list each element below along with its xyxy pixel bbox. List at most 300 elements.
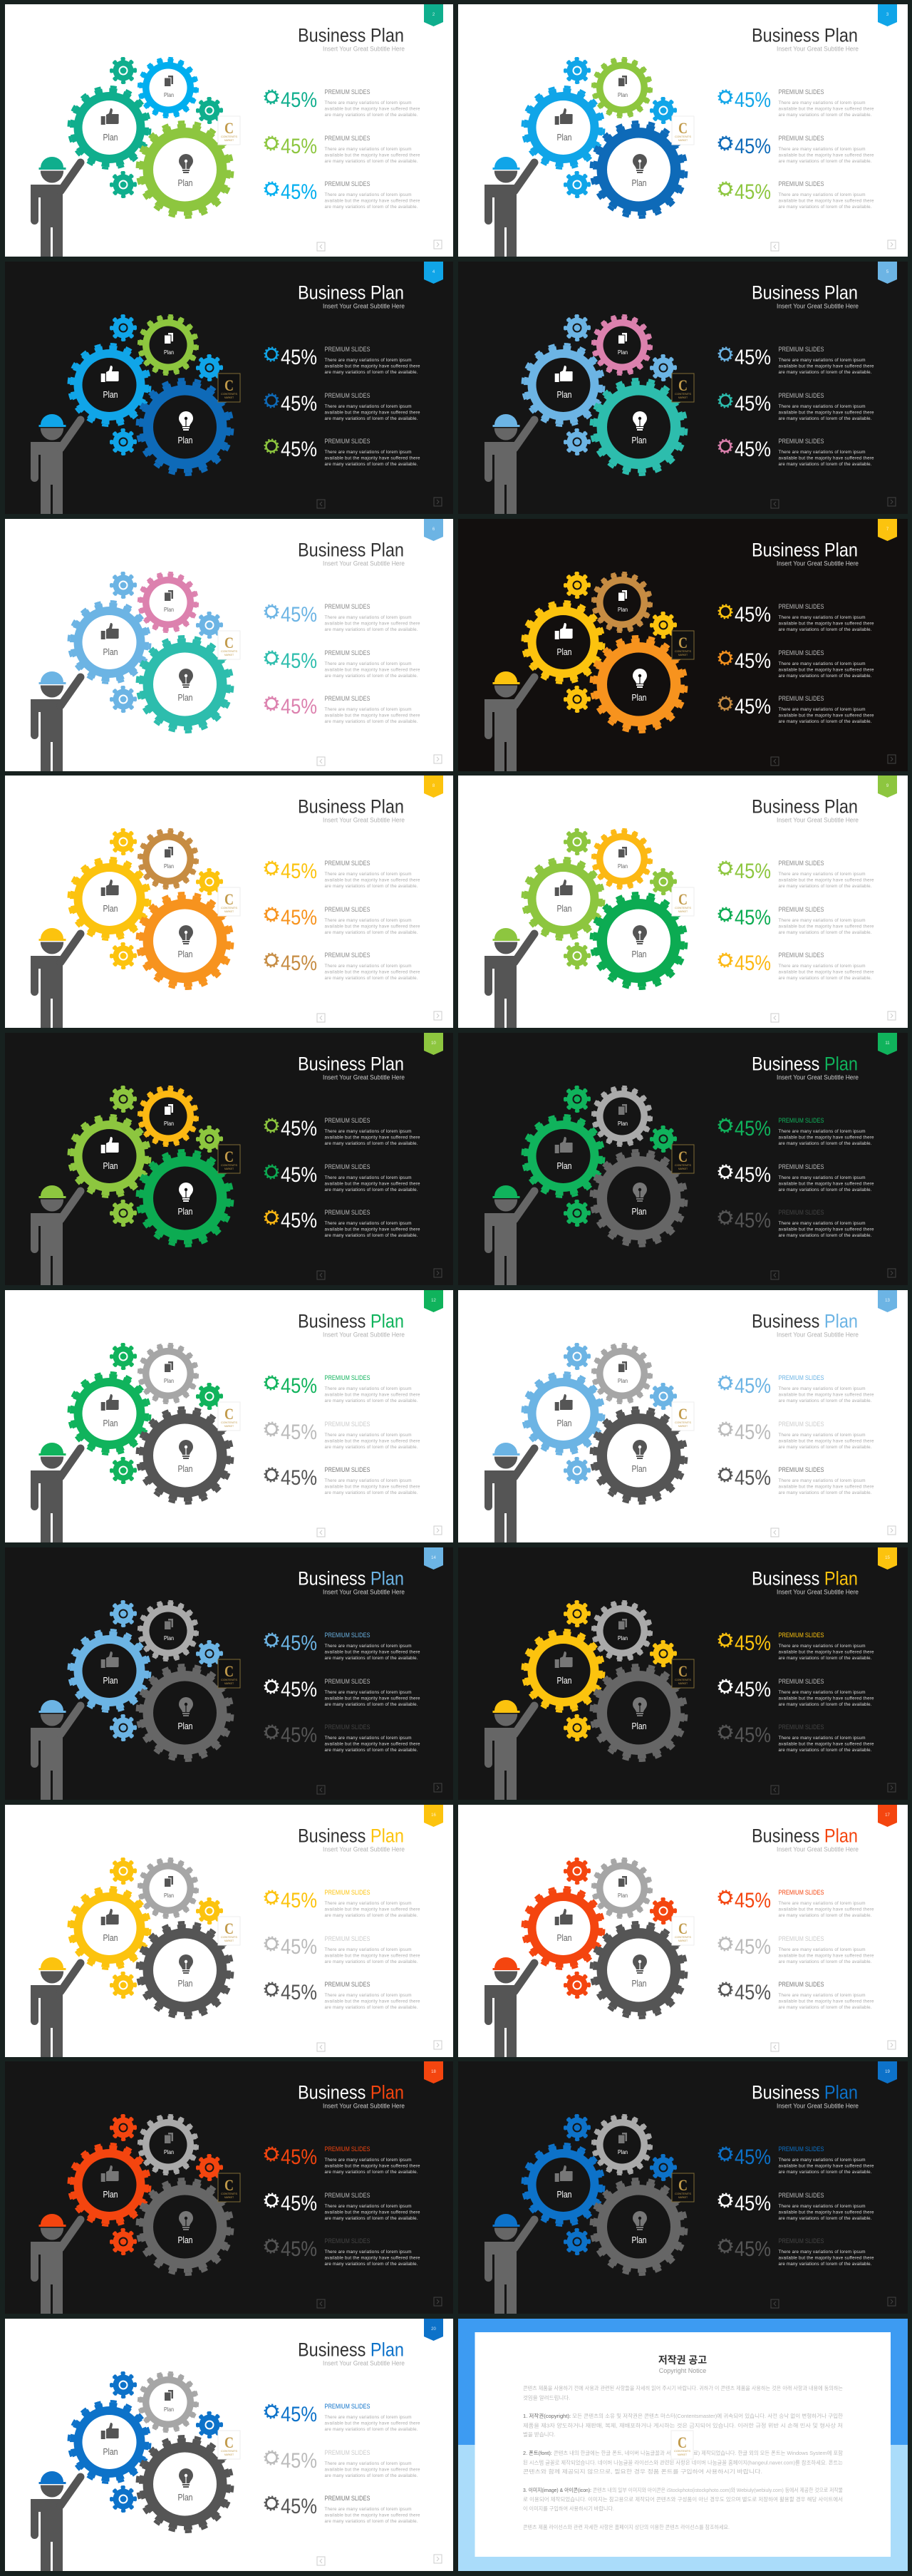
large bottom gear bbox=[591, 893, 686, 989]
gear icons bbox=[101, 2390, 193, 2488]
title: Business Plan bbox=[752, 1053, 858, 1074]
large bottom gear bbox=[591, 2179, 686, 2274]
stat row 1: PREMIUM SLIDES bbox=[778, 603, 824, 611]
stat row 3: available but the majority have suffered there bbox=[778, 1999, 874, 2004]
stat row 3 bbox=[718, 1209, 874, 1238]
logo badge: MARKET bbox=[678, 2196, 688, 2199]
stat row 3: PREMIUM SLIDES bbox=[778, 2237, 824, 2245]
gear labels: Plan bbox=[557, 647, 572, 657]
logo badge: MARKET bbox=[224, 1168, 234, 1170]
gear labels: Plan bbox=[631, 178, 647, 188]
gear icons bbox=[101, 1876, 193, 1974]
stat row 1: There are many variations of lorem ipsum bbox=[325, 358, 412, 363]
stat row 2: PREMIUM SLIDES bbox=[778, 1678, 824, 1686]
stat row 3: 45% bbox=[281, 1981, 317, 2004]
stat row 2: are many variations of lorem of the available. bbox=[325, 930, 418, 935]
page tag: 14 bbox=[431, 1556, 436, 1560]
title: Business Plan bbox=[752, 1825, 858, 1846]
stat row 3: 45% bbox=[735, 1466, 771, 1490]
stat row 1: 45% bbox=[281, 2145, 317, 2169]
section 1 copyright: 벌을 받습니다. bbox=[523, 2431, 556, 2438]
stat row 3: available but the majority have suffered there bbox=[778, 198, 874, 204]
nav buttons bbox=[771, 1011, 896, 1022]
stat row 3: 45% bbox=[735, 1981, 771, 2004]
stat row 1: There are many variations of lorem ipsum bbox=[325, 615, 412, 620]
stat row 3 bbox=[718, 2237, 874, 2267]
stat row 2 bbox=[264, 1678, 420, 1707]
stat row 2: 45% bbox=[735, 906, 771, 929]
gear labels: Plan bbox=[618, 1634, 628, 1642]
gear labels: Plan bbox=[164, 2148, 174, 2155]
stat row 1: 45% bbox=[735, 2145, 771, 2169]
large bottom gear bbox=[591, 122, 686, 217]
stat row 3 bbox=[264, 695, 420, 724]
stat row 3: available but the majority have suffered there bbox=[325, 1484, 420, 1490]
stat row 1: are many variations of lorem of the available. bbox=[325, 370, 418, 375]
logo badge bbox=[672, 887, 694, 916]
title: Business Plan bbox=[298, 539, 404, 560]
stat row 1 bbox=[718, 1632, 874, 1661]
stat row 3: PREMIUM SLIDES bbox=[325, 1981, 370, 1989]
stat row 2: PREMIUM SLIDES bbox=[325, 1421, 370, 1428]
page tag: 10 bbox=[431, 1041, 436, 1046]
nav buttons bbox=[317, 498, 442, 508]
stat row 3: 45% bbox=[735, 1724, 771, 1747]
stat row 2: 45% bbox=[281, 392, 317, 416]
slide 14 bbox=[5, 1547, 453, 1800]
stat row 2 bbox=[718, 392, 874, 421]
stat row 3: available but the majority have suffered there bbox=[325, 1999, 420, 2004]
subtitle: Insert Your Great Subtitle Here bbox=[323, 1589, 405, 1596]
gear labels: Plan bbox=[618, 349, 628, 356]
logo badge: CONTENTS bbox=[675, 907, 692, 910]
stat row 3: are many variations of lorem of the available. bbox=[778, 205, 872, 210]
stat row 1: There are many variations of lorem ipsum bbox=[778, 358, 865, 363]
logo badge bbox=[218, 1917, 240, 1945]
slide 4 bbox=[5, 262, 453, 514]
nav buttons bbox=[317, 2041, 442, 2051]
stat row 1: There are many variations of lorem ipsum bbox=[325, 1129, 412, 1134]
top gear bbox=[592, 1601, 652, 1661]
stat row 3: available but the majority have suffered there bbox=[325, 713, 420, 718]
stat row 1 bbox=[264, 1117, 420, 1146]
page tag bbox=[878, 2061, 897, 2083]
gear icons bbox=[555, 1619, 647, 1716]
stat row 3 bbox=[264, 2237, 420, 2267]
gear labels: Plan bbox=[103, 647, 118, 657]
stat row 3: available but the majority have suffered there bbox=[325, 969, 420, 975]
large bottom gear bbox=[138, 379, 232, 475]
small gears bbox=[564, 572, 676, 712]
logo badge: C bbox=[224, 2176, 234, 2194]
small gears bbox=[564, 1086, 676, 1226]
large bottom gear bbox=[138, 2436, 232, 2532]
stat row 1: available but the majority have suffered there bbox=[325, 107, 420, 111]
slide 9 bbox=[458, 776, 908, 1028]
stat row 3: available but the majority have suffered there bbox=[778, 969, 874, 975]
logo badge bbox=[671, 2431, 693, 2459]
small gears bbox=[110, 1601, 222, 1741]
gear labels: Plan bbox=[631, 1464, 647, 1474]
gear labels bbox=[103, 862, 193, 959]
gear icons bbox=[555, 1104, 647, 1202]
stat row 2 bbox=[718, 135, 874, 164]
stat row 1: PREMIUM SLIDES bbox=[325, 1632, 370, 1639]
large left gear bbox=[522, 1116, 604, 1197]
logo badge bbox=[672, 1659, 694, 1688]
stat row 3: PREMIUM SLIDES bbox=[325, 695, 370, 703]
stat row 3 bbox=[264, 2495, 420, 2524]
person with hard hat bbox=[484, 928, 534, 1028]
large bottom gear bbox=[138, 893, 232, 989]
gear labels bbox=[103, 1892, 193, 1989]
stat row 1: are many variations of lorem of the available. bbox=[325, 1398, 418, 1403]
gear labels: Plan bbox=[557, 1676, 572, 1686]
page tag bbox=[424, 2061, 443, 2083]
nav buttons bbox=[771, 755, 896, 766]
stat row 2: There are many variations of lorem ipsum bbox=[778, 918, 865, 923]
stat row 1: 45% bbox=[735, 1889, 771, 1912]
stat row 2: 45% bbox=[281, 2449, 317, 2473]
gear labels: Plan bbox=[557, 2190, 572, 2200]
stat row 2: available but the majority have suffered there bbox=[325, 1953, 420, 1959]
slide 10 bbox=[5, 1033, 453, 1285]
page tag: 8 bbox=[432, 784, 435, 788]
logo badge: CONTENTS bbox=[675, 135, 692, 138]
gear labels bbox=[557, 1120, 647, 1217]
title: Business Plan bbox=[298, 2081, 404, 2103]
small gears bbox=[564, 2115, 676, 2255]
title: Business Plan bbox=[298, 795, 404, 817]
copyright notice slide bbox=[458, 2319, 908, 2571]
logo badge: C bbox=[224, 119, 234, 137]
logo badge: C bbox=[224, 1662, 234, 1680]
top gear bbox=[138, 572, 198, 632]
title: Business Plan bbox=[752, 1567, 858, 1589]
logo badge: C bbox=[224, 1148, 234, 1165]
stat row 3: 45% bbox=[281, 1209, 317, 1232]
subtitle: Insert Your Great Subtitle Here bbox=[777, 46, 859, 53]
stat row 2: There are many variations of lorem ipsum bbox=[778, 404, 865, 409]
gear labels: Plan bbox=[103, 1418, 118, 1428]
stat row 1: 45% bbox=[281, 1117, 317, 1140]
stat row 1: There are many variations of lorem ipsum bbox=[778, 615, 865, 620]
stat row 3: are many variations of lorem of the available. bbox=[325, 1490, 418, 1495]
stat row 2: are many variations of lorem of the available. bbox=[325, 2473, 418, 2478]
stat row 1: available but the majority have suffered there bbox=[325, 1907, 420, 1912]
logo badge: C bbox=[678, 1662, 688, 1680]
stat row 1: 45% bbox=[281, 2403, 317, 2426]
logo badge bbox=[218, 2431, 240, 2459]
large bottom gear bbox=[138, 1150, 232, 1246]
stat row 2: available but the majority have suffered there bbox=[325, 924, 420, 929]
stat row 2: PREMIUM SLIDES bbox=[325, 649, 370, 657]
stat row 1: PREMIUM SLIDES bbox=[778, 88, 824, 96]
stat row 2: are many variations of lorem of the available. bbox=[778, 416, 872, 421]
stat row 2: are many variations of lorem of the available. bbox=[325, 159, 418, 164]
stat row 3: There are many variations of lorem ipsum bbox=[778, 450, 865, 455]
page tag: 6 bbox=[432, 527, 435, 532]
stat row 3: are many variations of lorem of the available. bbox=[778, 976, 872, 981]
stat row 1: There are many variations of lorem ipsum bbox=[778, 872, 865, 877]
nav buttons bbox=[771, 2297, 896, 2308]
page tag: 9 bbox=[886, 784, 889, 788]
stat row 3: There are many variations of lorem ipsum bbox=[778, 707, 865, 712]
logo badge: MARKET bbox=[224, 910, 234, 913]
small gears bbox=[564, 1601, 676, 1741]
logo badge: C bbox=[678, 2176, 688, 2194]
stat row 2: There are many variations of lorem ipsum bbox=[325, 2461, 412, 2466]
stat row 1: are many variations of lorem of the available. bbox=[325, 1913, 418, 1918]
stat row 2: There are many variations of lorem ipsum bbox=[778, 2204, 865, 2209]
stat row 3: are many variations of lorem of the available. bbox=[778, 1748, 872, 1753]
top gear bbox=[138, 1344, 198, 1403]
section 2 font: 된 시스템 글꼴로 제작되었습니다. 네이버 나눔글꼴 라이선스와 관련된 사항은 네이버 나눔글꼴 홈페이지(hangeul.naver.com)를 참조하세요. 폰트는 bbox=[523, 2459, 843, 2466]
stat row 2: PREMIUM SLIDES bbox=[325, 906, 370, 914]
stat row 3 bbox=[718, 438, 874, 467]
stat row 2: 45% bbox=[281, 1678, 317, 1701]
stat row 1: are many variations of lorem of the available. bbox=[778, 1398, 872, 1403]
stat row 3: PREMIUM SLIDES bbox=[325, 952, 370, 959]
stat row 1: PREMIUM SLIDES bbox=[778, 346, 824, 354]
gear labels: Plan bbox=[164, 1634, 174, 1642]
section 2 font: 2. 폰트(font): 콘텐츠 내의 한글에는 한글 폰트, 네이버 나눔글꼴과 서울서체 (무료) 제작되었습니다. 한글 외의 모든 폰트는 Windows System에 포함 bbox=[523, 2449, 843, 2456]
page tag bbox=[424, 4, 443, 26]
stat row 2: There are many variations of lorem ipsum bbox=[325, 1690, 412, 1695]
large bottom gear bbox=[591, 1922, 686, 2018]
section 2 font: 콘텐츠와 함께 제공되지 않으므로, 필요한 경우 정품 폰트를 구입하여 사용하시기 바랍니다. bbox=[523, 2468, 762, 2475]
large left gear bbox=[68, 344, 150, 426]
stat row 3: are many variations of lorem of the available. bbox=[325, 1748, 418, 1753]
stat row 1 bbox=[264, 88, 420, 118]
intro paragraph bbox=[523, 2384, 843, 2401]
slide 17 bbox=[458, 1805, 908, 2057]
person with hard hat bbox=[484, 671, 534, 771]
logo badge: MARKET bbox=[224, 654, 234, 656]
large left gear bbox=[68, 1630, 150, 1711]
stat row 1: are many variations of lorem of the available. bbox=[325, 1656, 418, 1661]
top gear bbox=[138, 2115, 198, 2175]
large left gear bbox=[522, 344, 604, 426]
page tag: 3 bbox=[886, 13, 889, 17]
stat row 2: available but the majority have suffered there bbox=[778, 1696, 874, 1701]
large left gear bbox=[68, 2144, 150, 2225]
logo badge bbox=[218, 373, 240, 402]
stat row 1: 45% bbox=[281, 346, 317, 369]
subtitle: Insert Your Great Subtitle Here bbox=[323, 817, 405, 824]
stat row 2: 45% bbox=[735, 2192, 771, 2215]
gear labels: Plan bbox=[557, 904, 572, 914]
stat row 2: are many variations of lorem of the available. bbox=[325, 1959, 418, 1964]
stat row 1 bbox=[264, 1374, 420, 1403]
stat row 3: There are many variations of lorem ipsum bbox=[778, 1993, 865, 1998]
top gear bbox=[592, 315, 652, 375]
stat row 2: available but the majority have suffered there bbox=[325, 1182, 420, 1186]
title: Business Plan bbox=[298, 1825, 404, 1846]
logo badge: C bbox=[224, 634, 234, 651]
logo badge: C bbox=[678, 119, 688, 137]
stat row 1 bbox=[264, 860, 420, 889]
top gear bbox=[138, 829, 198, 889]
page tag bbox=[424, 1805, 443, 1827]
logo badge bbox=[218, 1402, 240, 1431]
title: Business Plan bbox=[752, 282, 858, 303]
page tag bbox=[424, 1033, 443, 1055]
stat row 1: PREMIUM SLIDES bbox=[778, 1889, 824, 1897]
stat row 3: There are many variations of lorem ipsum bbox=[325, 707, 412, 712]
section 3 image and icon: 이 이미지를 구입하여 사용하시기 바랍니다. bbox=[523, 2505, 614, 2512]
gear labels: Plan bbox=[178, 1721, 193, 1731]
gear labels: Plan bbox=[618, 862, 628, 870]
logo badge bbox=[672, 631, 694, 659]
stat row 2: available but the majority have suffered there bbox=[778, 411, 874, 415]
stat row 3: are many variations of lorem of the available. bbox=[325, 205, 418, 210]
stat row 1 bbox=[718, 603, 874, 632]
stat row 1: available but the majority have suffered there bbox=[325, 1649, 420, 1655]
slide 20 bbox=[5, 2319, 453, 2571]
stat row 3: are many variations of lorem of the available. bbox=[325, 976, 418, 981]
logo badge bbox=[672, 116, 694, 145]
stat row 3: There are many variations of lorem ipsum bbox=[778, 964, 865, 969]
logo badge: C bbox=[678, 1148, 688, 1165]
stat row 1: are many variations of lorem of the available. bbox=[325, 2170, 418, 2175]
stat row 1 bbox=[264, 1632, 420, 1661]
stat row 1: are many variations of lorem of the available. bbox=[325, 884, 418, 889]
gear icons bbox=[555, 847, 647, 944]
gear labels bbox=[103, 91, 193, 188]
stat row 1: PREMIUM SLIDES bbox=[778, 2145, 824, 2153]
logo badge: CONTENTS bbox=[675, 2193, 692, 2195]
stat row 3 bbox=[718, 180, 874, 210]
person with hard hat bbox=[31, 2471, 81, 2571]
title: Business Plan bbox=[298, 2339, 404, 2360]
stat row 3: 45% bbox=[735, 1209, 771, 1232]
stat row 1: PREMIUM SLIDES bbox=[778, 1632, 824, 1639]
logo badge: CONTENTS bbox=[221, 135, 238, 138]
logo badge: MARKET bbox=[224, 1682, 234, 1685]
stat row 2: PREMIUM SLIDES bbox=[778, 392, 824, 400]
top gear bbox=[138, 1086, 198, 1146]
person with hard hat bbox=[31, 1957, 81, 2057]
stat row 2: There are many variations of lorem ipsum bbox=[325, 1175, 412, 1180]
gear labels: Plan bbox=[178, 1979, 193, 1989]
stat row 1: PREMIUM SLIDES bbox=[325, 2403, 370, 2411]
logo badge: C bbox=[678, 2433, 687, 2451]
title: Business Plan bbox=[298, 1310, 404, 1331]
logo badge: MARKET bbox=[224, 2196, 234, 2199]
stat row 2: are many variations of lorem of the available. bbox=[778, 674, 872, 679]
large left gear bbox=[522, 1630, 604, 1711]
stat row 3: are many variations of lorem of the available. bbox=[778, 1490, 872, 1495]
stat row 2: PREMIUM SLIDES bbox=[325, 135, 370, 143]
stat row 3: are many variations of lorem of the available. bbox=[325, 2262, 418, 2267]
stat row 1: There are many variations of lorem ipsum bbox=[325, 2158, 412, 2163]
stat row 2: are many variations of lorem of the available. bbox=[778, 1959, 872, 1964]
logo badge: MARKET bbox=[678, 1939, 688, 1942]
stat row 2: There are many variations of lorem ipsum bbox=[778, 1175, 865, 1180]
gear labels: Plan bbox=[618, 1120, 628, 1127]
logo badge: C bbox=[678, 890, 688, 908]
stat row 3: available but the majority have suffered there bbox=[325, 198, 420, 204]
logo badge: CONTENTS bbox=[221, 1164, 238, 1167]
top gear bbox=[592, 1086, 652, 1146]
small gears bbox=[110, 1858, 222, 1998]
gear icons bbox=[101, 2133, 193, 2230]
stat row 1 bbox=[718, 346, 874, 375]
gear labels: Plan bbox=[178, 1207, 193, 1217]
stat row 1: There are many variations of lorem ipsum bbox=[778, 1901, 865, 1906]
stat row 2: available but the majority have suffered there bbox=[325, 2210, 420, 2215]
gear labels: Plan bbox=[631, 436, 647, 445]
section 3 image and icon: 3. 이미지(image) & 아이콘(icon): 콘텐츠 내의 일부 이미지와 아이콘은 iStockphoto(istockphoto.com)와 Webiuly(webiuly.com) 등에서 제공한 것으로 저작물 bbox=[523, 2486, 843, 2493]
stat row 1: are many variations of lorem of the available. bbox=[778, 1913, 872, 1918]
top gear bbox=[592, 2115, 652, 2175]
stat row 3: There are many variations of lorem ipsum bbox=[778, 1478, 865, 1483]
title: Business Plan bbox=[752, 24, 858, 46]
stat row 2 bbox=[264, 906, 420, 935]
stat row 1: are many variations of lorem of the available. bbox=[778, 2170, 872, 2175]
slide 2 bbox=[5, 4, 453, 257]
stat row 2: 45% bbox=[281, 1163, 317, 1187]
large bottom gear bbox=[138, 2179, 232, 2274]
gear labels bbox=[557, 862, 647, 959]
stat row 1: are many variations of lorem of the available. bbox=[325, 627, 418, 632]
logo badge: CONTENTS bbox=[675, 393, 692, 396]
stat row 2 bbox=[264, 1421, 420, 1450]
title: Business Plan bbox=[752, 1310, 858, 1331]
stat row 2: There are many variations of lorem ipsum bbox=[325, 1947, 412, 1952]
page tag: 20 bbox=[431, 2327, 436, 2332]
gear icons bbox=[101, 1361, 193, 1459]
gear labels: Plan bbox=[103, 1676, 118, 1686]
stat row 1: PREMIUM SLIDES bbox=[778, 860, 824, 867]
logo badge bbox=[672, 2173, 694, 2202]
title: Business Plan bbox=[298, 1053, 404, 1074]
logo badge: MARKET bbox=[678, 1425, 688, 1428]
gear labels bbox=[557, 606, 647, 703]
stat row 3: are many variations of lorem of the available. bbox=[778, 2262, 872, 2267]
page tag bbox=[878, 1290, 897, 1312]
gear labels: Plan bbox=[178, 1464, 193, 1474]
stat row 1: There are many variations of lorem ipsum bbox=[325, 1644, 412, 1649]
stat row 3: PREMIUM SLIDES bbox=[325, 180, 370, 188]
stat row 3: PREMIUM SLIDES bbox=[778, 1981, 824, 1989]
large bottom gear bbox=[138, 1665, 232, 1761]
large left gear bbox=[68, 87, 150, 168]
stat row 1 bbox=[718, 860, 874, 889]
stat row 3: There are many variations of lorem ipsum bbox=[325, 192, 412, 197]
page tag: 13 bbox=[885, 1299, 890, 1303]
stat row 2: available but the majority have suffered there bbox=[778, 1953, 874, 1959]
large bottom gear bbox=[591, 637, 686, 732]
page tag bbox=[878, 4, 897, 26]
stat row 1 bbox=[264, 2145, 420, 2175]
subtitle: Insert Your Great Subtitle Here bbox=[323, 46, 405, 53]
top gear bbox=[592, 58, 652, 118]
stat row 2: 45% bbox=[281, 649, 317, 673]
title: Business Plan bbox=[752, 2081, 858, 2103]
stat row 3: PREMIUM SLIDES bbox=[325, 1724, 370, 1731]
stat row 1: 45% bbox=[281, 860, 317, 883]
top gear bbox=[138, 315, 198, 375]
stat row 1 bbox=[718, 1117, 874, 1146]
stat row 1: 45% bbox=[735, 860, 771, 883]
stat row 1: PREMIUM SLIDES bbox=[778, 1117, 824, 1125]
stat row 2: available but the majority have suffered there bbox=[778, 2210, 874, 2215]
gear labels: Plan bbox=[557, 133, 572, 143]
gear labels bbox=[103, 1634, 193, 1731]
gear icons bbox=[555, 1361, 647, 1459]
